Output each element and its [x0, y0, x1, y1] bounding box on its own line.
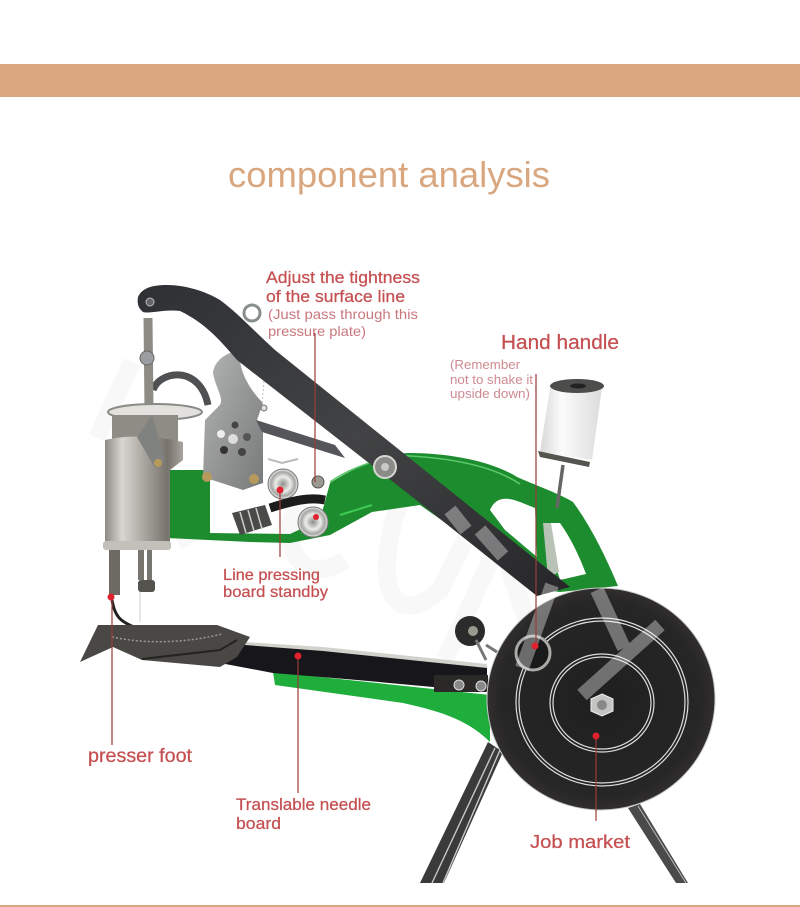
black lever arm	[138, 285, 570, 596]
callout: translable needle board: Translable needle	[236, 795, 371, 814]
callout: adjust tightness: (Just pass through this	[268, 306, 418, 322]
callout: presser foot	[88, 594, 193, 767]
silver cylinder head	[103, 404, 202, 550]
callout: hand handle: (Remember	[450, 358, 520, 372]
lower beam	[273, 672, 490, 742]
callout: hand handle	[450, 332, 619, 650]
callout: line pressing board standby: Line pressing	[223, 567, 320, 584]
frame windows	[490, 499, 537, 557]
watermark strokes over machine	[450, 510, 660, 695]
callout: job market	[530, 732, 630, 852]
callout: hand handle: Hand handle	[501, 332, 619, 354]
coil spring	[232, 499, 325, 535]
machine legs	[420, 742, 688, 883]
callout: translable needle board: board	[236, 814, 281, 833]
callout: translable needle board	[236, 652, 371, 833]
callout: line pressing board standby: board standby	[223, 584, 328, 601]
silver tension plate	[202, 350, 345, 490]
needle board	[220, 642, 488, 692]
small guide roller	[455, 616, 497, 660]
thread spool	[538, 379, 604, 508]
callout: adjust tightness	[266, 269, 420, 482]
callout: presser foot: presser foot	[88, 746, 193, 767]
callout: adjust tightness: Adjust the tightness	[266, 269, 420, 287]
green cast frame	[167, 453, 618, 742]
top banner band	[0, 64, 800, 97]
tension rollers	[268, 459, 328, 537]
thread ring	[244, 305, 260, 321]
bottom band	[0, 905, 800, 907]
leather workpiece	[80, 625, 250, 667]
callout: job market: Job market	[530, 831, 630, 852]
presser foot and needle assembly	[109, 550, 155, 627]
curved strap and needle rod	[140, 318, 208, 410]
callout: adjust tightness: of the surface line	[266, 288, 405, 306]
callout: hand handle: not to shake it	[450, 373, 534, 387]
hand wheel	[487, 588, 715, 810]
faint watermark on background	[97, 362, 530, 660]
callout: line pressing board standby	[223, 486, 328, 601]
title: component analysis	[228, 154, 550, 195]
callout: adjust tightness: pressure plate)	[268, 323, 366, 339]
callout: hand handle: upside down)	[450, 387, 530, 401]
sewing machine illustration	[80, 285, 715, 883]
